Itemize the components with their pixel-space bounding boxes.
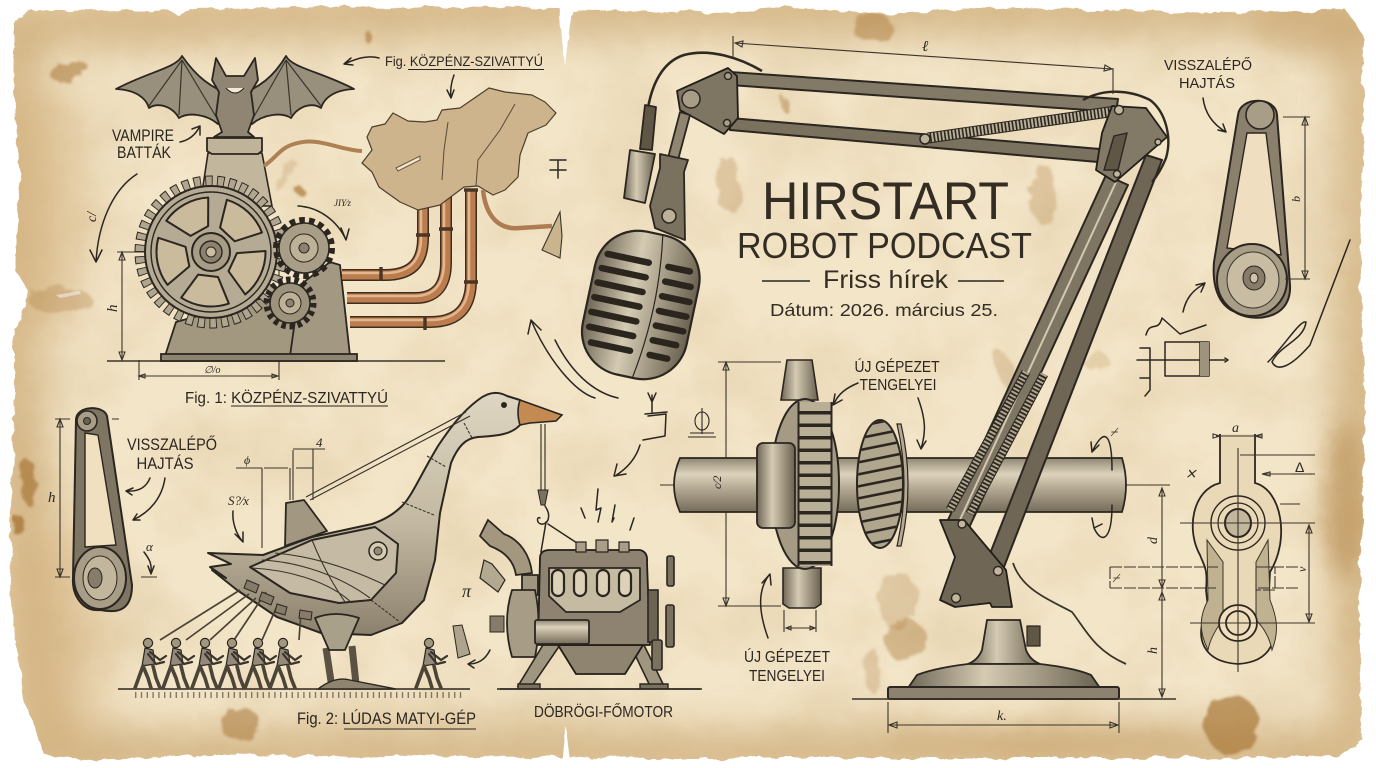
label: a: a [1232, 421, 1239, 436]
exhaust pipe stub [522, 575, 538, 595]
label: v: v [1295, 566, 1309, 572]
figure: vampire bat pump [85, 52, 556, 380]
label: uj gepezet bottom [744, 647, 830, 685]
centre curved arrows and sketch [528, 320, 667, 476]
big gear [140, 181, 282, 323]
pump right housing [290, 262, 350, 356]
bracket bolts [952, 520, 1002, 602]
cable to mic [648, 53, 762, 108]
label: dimension glyph: ∅/o [204, 365, 220, 376]
starter [535, 620, 589, 644]
dimension lines: link [1110, 434, 1315, 672]
label: right visszalepo [1164, 57, 1252, 92]
mic holder [650, 112, 690, 240]
title: hirstart: HIRSTART [762, 172, 1009, 231]
top stub [781, 360, 818, 400]
label: uj gepezet bottom: TENGELYEI [749, 668, 825, 685]
arrow: up curved [528, 320, 595, 398]
cable lower [1013, 563, 1126, 664]
arrows: belt [126, 478, 165, 520]
caption: fig 2: Fig. 2: LÚDAS MATYI-GÉP [297, 709, 476, 728]
label: phi symbol [688, 408, 716, 437]
belt [1214, 101, 1290, 318]
dimension lines: pump [107, 240, 445, 380]
bottom pulley [1217, 244, 1287, 316]
goose legs [318, 646, 396, 689]
goose beak [518, 400, 562, 425]
figure: left belt drive [48, 408, 165, 611]
copper pipes [342, 185, 471, 322]
arrow: worker [468, 650, 490, 668]
goose dimensions [236, 449, 325, 548]
lower eye [1219, 605, 1257, 641]
label: delta: Δ [1295, 459, 1304, 475]
label: h: h [1146, 647, 1161, 654]
dimension: l [733, 36, 1113, 94]
workers [135, 638, 301, 688]
exhaust [480, 520, 532, 575]
goose wing [250, 527, 398, 603]
small torn sketch: centre top [542, 160, 566, 258]
label: right visszalepo: VISSZALÉPŐ [1164, 57, 1252, 74]
big disc gear [771, 399, 839, 569]
goose thigh [315, 614, 359, 650]
goose fin [285, 500, 327, 546]
river: right [483, 190, 552, 228]
label: uj gepezet top: ÚJ GÉPEZET [854, 357, 940, 376]
lower arm members [948, 155, 1162, 572]
bottom stub [783, 568, 821, 608]
label: rotation glyph: c/ [85, 211, 100, 222]
label: dobrogi fomotor: DÖBRÖGI-FŐMOTOR [534, 702, 673, 721]
lone worker [416, 625, 470, 688]
label: right visszalepo: HAJTÁS [1179, 75, 1235, 92]
tower cap [207, 138, 262, 154]
base dome [908, 664, 1100, 688]
small gear upper [277, 221, 331, 275]
date: Dátum: 2026. március 25. [770, 300, 998, 320]
lever boxes [244, 580, 312, 620]
label: four: 4 [316, 435, 323, 450]
subtitle: robot podcast: ROBOT PODCAST [737, 225, 1032, 266]
label: vampire battak: BATTÁK [117, 143, 172, 162]
underline delta [1292, 473, 1312, 475]
label: alpha: α [146, 539, 154, 554]
left joint bolts [682, 72, 732, 126]
base plate [161, 354, 357, 361]
joint bolts [1104, 106, 1161, 178]
label: uj gepezet top: TENGELYEI [860, 377, 936, 394]
arrow: pointer [1183, 283, 1205, 312]
label: left visszalepo [127, 435, 217, 473]
left joint plate [677, 68, 738, 134]
shaft bolt [490, 616, 504, 632]
shaft glyph: c⁄2 [710, 476, 724, 489]
label: k: k. [997, 709, 1007, 724]
base neck [968, 620, 1040, 664]
torn fragment [480, 560, 505, 592]
river: left [264, 142, 362, 166]
pull levers [160, 590, 301, 640]
oil pan [558, 645, 643, 674]
arrow: rotation around shaft [1091, 437, 1112, 537]
arrow: bat pointer [180, 126, 200, 142]
title block [737, 172, 1032, 320]
label: glyph sr: S?⁄x [228, 493, 249, 508]
cylinders [552, 570, 631, 596]
engine legs [518, 640, 664, 686]
cable right [1083, 92, 1168, 182]
arrow: belt [1203, 98, 1226, 132]
tow rope [306, 412, 470, 500]
link body [1193, 434, 1281, 664]
label: figure heading: Fig. KÖZPÉNZ-SZIVATTYÚ [385, 52, 543, 69]
lower bracket [940, 520, 1012, 607]
figure: gear shaft [660, 357, 1140, 685]
arrow: bottom label [761, 574, 771, 638]
dimension: b [1283, 117, 1310, 279]
dimension lines: shaft [660, 362, 1140, 632]
label: uj gepezet bottom: ÚJ GÉPEZET [744, 647, 830, 666]
sparks [581, 489, 634, 530]
label: x glyph: ⨯ [1185, 467, 1197, 482]
label: vampire battak: VAMPIRE [112, 126, 174, 145]
arrow: goose tail [233, 511, 243, 542]
label: rotation glyph: ⌿ [1110, 425, 1119, 439]
arrow: rotation left [90, 174, 137, 262]
engine feet [500, 684, 700, 689]
right joint plate [1096, 106, 1167, 182]
label: l: ℓ [922, 39, 928, 55]
microphone head [574, 223, 708, 387]
arrow: heading down [447, 75, 454, 98]
goose body [208, 393, 520, 635]
label: gear glyphs: JIY⁄z [334, 198, 352, 208]
subtitle: friss hirek: Friss hírek [823, 266, 949, 294]
upper eye [1211, 496, 1265, 550]
hub collar [757, 443, 795, 528]
arrow: down curved [614, 445, 640, 476]
arm springs [950, 372, 1044, 514]
arrow: small gear rotation [298, 206, 349, 240]
goose eye [501, 402, 507, 408]
label: h: h [105, 304, 121, 312]
valve cover [549, 568, 640, 612]
label: b: b [1289, 196, 1303, 202]
right pulleys [648, 556, 674, 670]
glyph: pi: π [462, 581, 472, 601]
helical gear [856, 419, 909, 549]
crane cable and hook [538, 424, 580, 552]
ground line [497, 688, 702, 690]
top bar [730, 72, 1118, 112]
pump base [165, 278, 350, 356]
mic connector [624, 105, 656, 203]
figure: microphone boom arm [574, 36, 1176, 733]
label: d: d [1146, 536, 1161, 544]
figure: goose machine [118, 393, 580, 695]
bat [116, 56, 354, 137]
dimension: h left [55, 419, 157, 577]
knob [1027, 626, 1040, 646]
link hatching [1201, 540, 1276, 650]
hook sketch [1268, 240, 1350, 367]
shaft [674, 458, 1126, 512]
label: left visszalepo: HAJTÁS [136, 454, 194, 473]
lower bar [730, 118, 1100, 162]
engine block [538, 550, 650, 645]
ground line and dimensions [852, 485, 1176, 733]
figure: right belt drive [1137, 57, 1350, 396]
ground with hatching [118, 689, 470, 695]
toothed rim [798, 402, 832, 566]
label: phi: ϕ [244, 453, 250, 467]
caption: fig 1: Fig. 1: KÖZPÉNZ-SZIVATTYÚ [185, 388, 388, 407]
base plate [888, 687, 1119, 699]
small section sketch [1137, 318, 1228, 396]
small gear lower [267, 280, 313, 326]
label: left visszalepo: VISSZALÉPŐ [127, 435, 217, 454]
caps [576, 540, 629, 552]
label: vampire battak [112, 126, 174, 162]
label: cross glyph: ⌿ [1112, 571, 1121, 585]
label: h glyph: h [48, 490, 56, 506]
top pulley [1246, 101, 1274, 129]
pump tower [200, 153, 272, 206]
arrow: alpha [144, 552, 154, 574]
label: uj gepezet top [854, 357, 940, 394]
flywheel [507, 590, 538, 657]
goose seams [371, 423, 472, 622]
arrow: heading left [344, 57, 379, 65]
figure: dobrogi engine [462, 489, 702, 689]
small sketch [643, 393, 667, 440]
map of Hungary [362, 88, 556, 210]
figure: link section drawing [1110, 421, 1315, 672]
horizontal spring [920, 111, 1116, 144]
arrows: top label [833, 383, 926, 449]
pipe collars [381, 187, 478, 330]
